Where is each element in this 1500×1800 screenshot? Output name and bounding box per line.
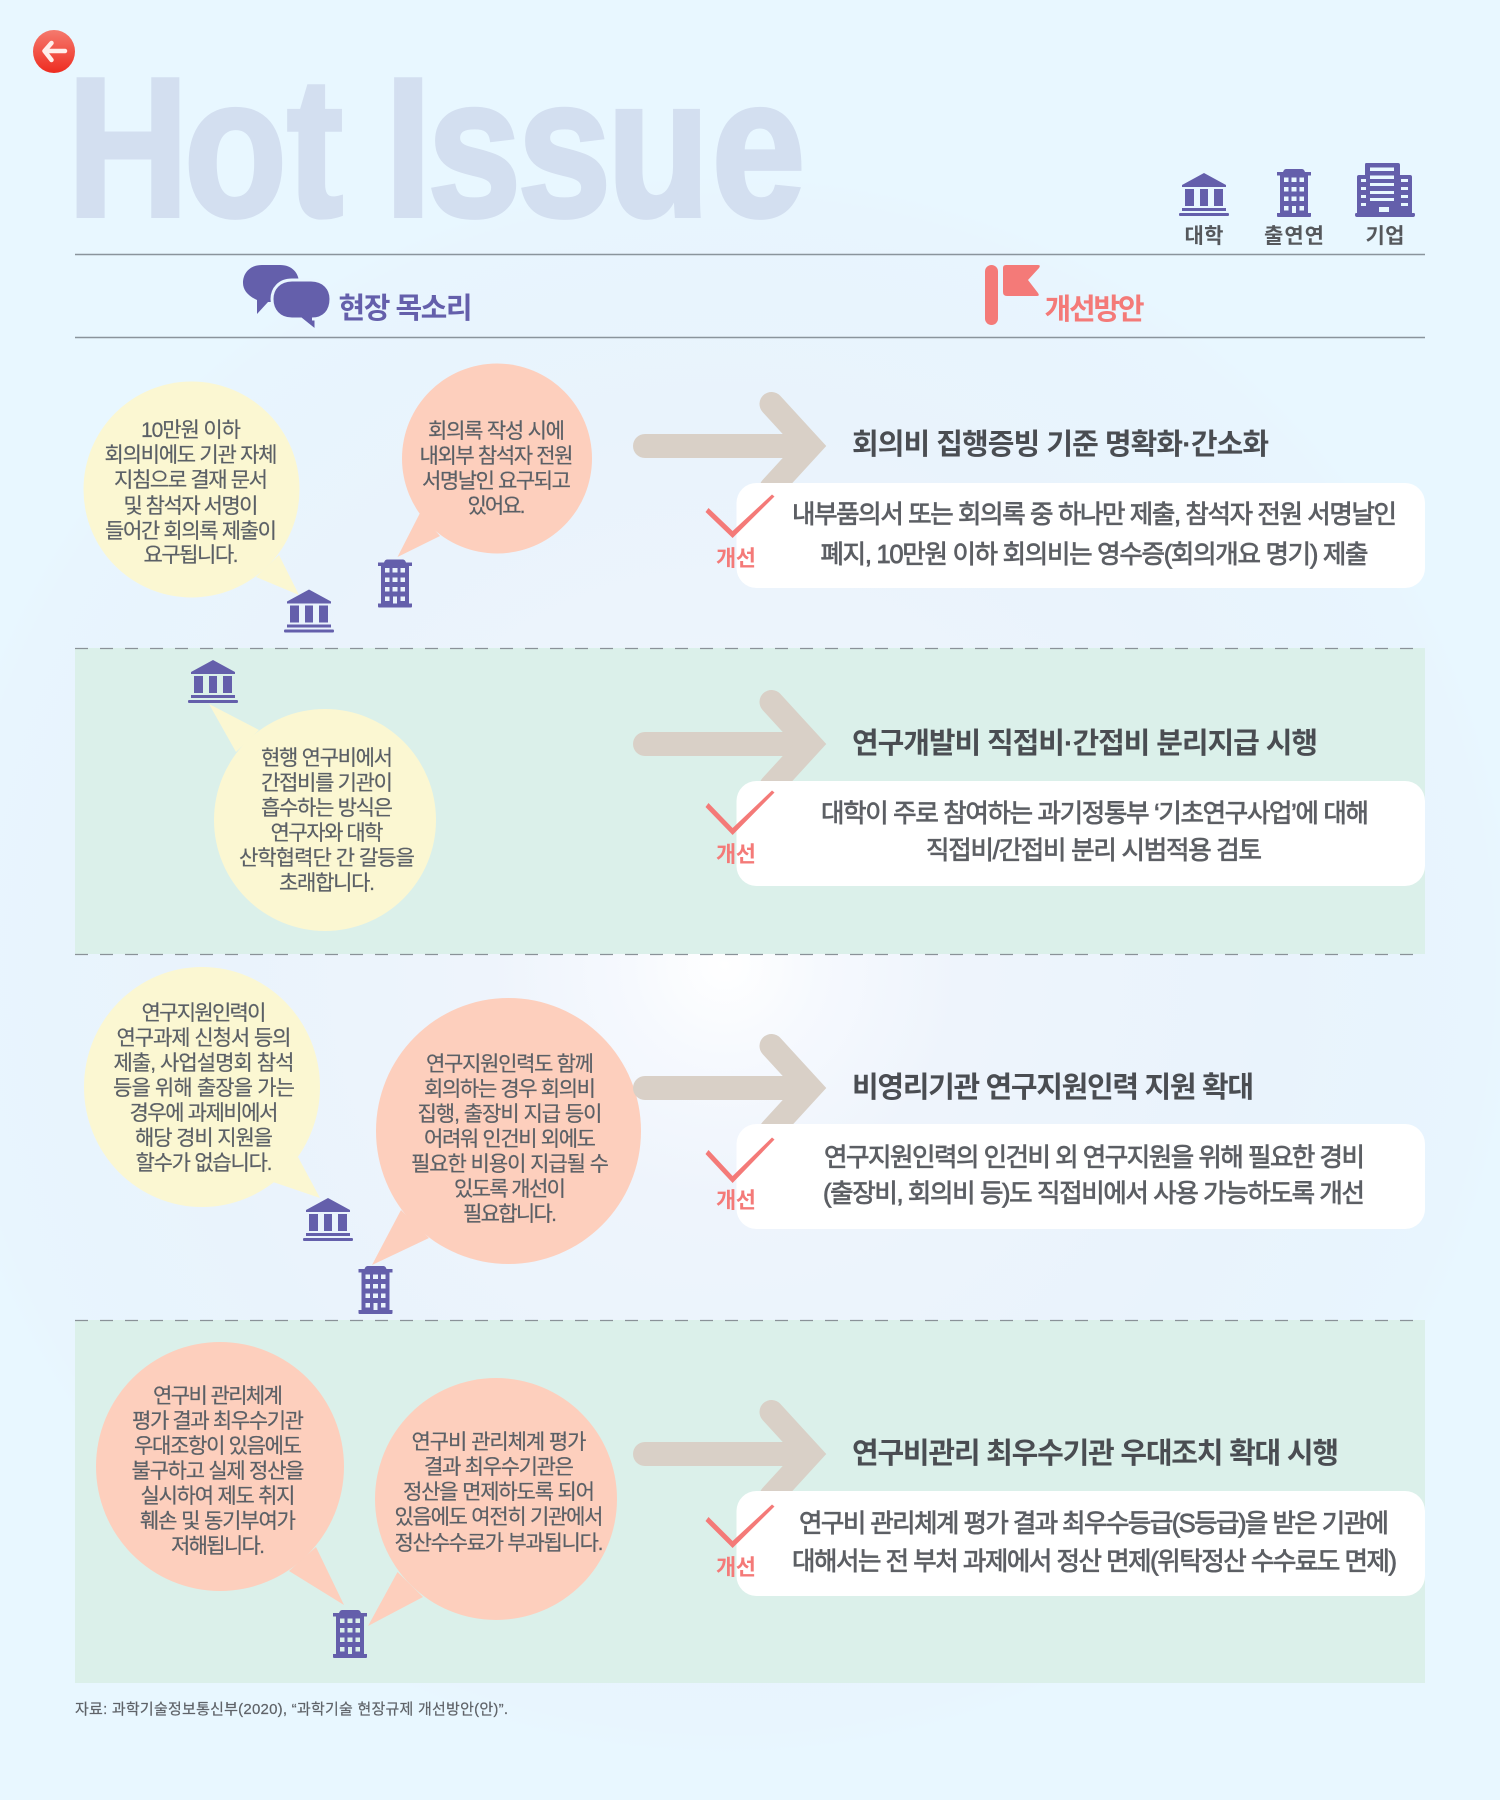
speech bubble: research institute, left: 불구하고 실제 정산을 xyxy=(132,1460,304,1483)
speech bubble: research institute: 있도록 개선이 xyxy=(454,1178,566,1201)
arrow xyxy=(645,1046,810,1130)
check mark with label: 개선 xyxy=(716,1555,756,1580)
arrow xyxy=(645,404,810,488)
speech bubble: university: 산학협력단 간 갈등을 xyxy=(239,847,415,870)
improvement detail box: 폐지, 10만원 이하 회의비는 영수증(회의개요 명기) 제출 xyxy=(820,541,1368,569)
icon: back button xyxy=(33,30,75,73)
speech bubble: university: 간접비를 기관이 xyxy=(261,772,393,795)
speech bubble: research institute: 어려워 인건비 외에도 xyxy=(424,1128,596,1151)
heading text: 현장 목소리 xyxy=(338,292,472,325)
legend: institution types xyxy=(1179,163,1415,248)
speech bubble: university: 연구자와 대학 xyxy=(270,822,384,845)
section 4 xyxy=(96,1342,1425,1658)
icon: university xyxy=(303,1198,353,1241)
speech bubble: university: 연구과제 신청서 등의 xyxy=(116,1027,292,1050)
improvement title: 연구개발비 직접비·간접비 분리지급 시행 xyxy=(852,727,1318,760)
check mark with label: 개선 xyxy=(716,1188,756,1213)
speech bubble: research institute: 연구지원인력도 함께 xyxy=(426,1053,594,1076)
improvement detail box xyxy=(736,1124,1425,1229)
legend label: company: 기업 xyxy=(1366,225,1404,248)
section 1 xyxy=(84,364,1425,632)
speech bubble: research institute, left: 실시하여 제도 취지 xyxy=(140,1485,296,1508)
icon: university xyxy=(284,590,334,632)
source note: 자료: 과학기술정보통신부(2020), “과학기술 현장규제 개선방안(안)”. xyxy=(75,1701,508,1718)
improvement detail box xyxy=(736,483,1425,588)
improvement title: 연구비관리 최우수기관 우대조치 확대 시행 xyxy=(852,1437,1339,1470)
column heading: improvement plan xyxy=(985,265,1144,326)
speech bubble: research institute: 필요한 비용이 지급될 수 xyxy=(411,1153,609,1176)
speech bubble: university: 흡수하는 방식은 xyxy=(261,797,393,820)
speech bubble: research institute: 집행, 출장비 지급 등이 xyxy=(418,1103,602,1126)
speech bubble: university xyxy=(84,382,300,598)
column heading: field voices xyxy=(243,265,472,331)
speech bubble: university: 회의비에도 기관 자체 xyxy=(104,444,278,467)
speech bubble: university: 연구지원인력이 xyxy=(142,1002,266,1025)
speech bubble: research institute, left: 연구비 관리체계 xyxy=(153,1385,283,1408)
icon: research institute xyxy=(378,560,412,608)
speech bubble: research institute, left: 훼손 및 동기부여가 xyxy=(140,1510,296,1533)
title: Hot Issue: Hot Issue xyxy=(67,37,805,258)
speech bubble: university: 경우에 과제비에서 xyxy=(130,1102,278,1125)
improvement detail box: (출장비, 회의비 등)도 직접비에서 사용 가능하도록 개선 xyxy=(823,1180,1365,1208)
check mark with label xyxy=(706,494,774,571)
speech bubble: research institute: 있어요. xyxy=(468,495,526,518)
speech bubble: research institute xyxy=(372,998,641,1265)
improvement detail box xyxy=(736,781,1425,886)
speech bubble: university: 10만원 이하 xyxy=(141,419,241,442)
icon: university xyxy=(1179,173,1229,216)
improvement title: 회의비 집행증빙 기준 명확화·간소화 xyxy=(852,428,1269,461)
improvement detail box: 대학이 주로 참여하는 과기정통부 ‘기초연구사업’에 대해 xyxy=(821,800,1369,828)
improvement detail box: 내부품의서 또는 회의록 중 하나만 제출, 참석자 전원 서명날인 xyxy=(792,501,1397,529)
speech bubble: research institute, right xyxy=(368,1378,617,1626)
section 2 xyxy=(188,660,1425,931)
arrow xyxy=(645,702,810,786)
speech bubble: research institute, right: 정산을 면제하도록 되어 xyxy=(403,1481,595,1504)
speech bubble: research institute: 서명날인 요구되고 xyxy=(422,470,571,493)
improvement title: 비영리기관 연구지원인력 지원 확대 xyxy=(852,1071,1254,1104)
speech bubble: research institute, right: 있음에도 여전히 기관에서 xyxy=(394,1506,604,1529)
improvement detail box xyxy=(736,1491,1425,1596)
improvement detail box: 직접비/간접비 분리 시범적용 검토 xyxy=(926,837,1262,865)
speech bubble: university: 및 참석자 서명이 xyxy=(124,495,258,518)
speech bubble: university: 제출, 사업설명회 참석 xyxy=(114,1052,294,1075)
speech bubble: research institute, right: 정산수수료가 부과됩니다. xyxy=(394,1532,604,1555)
arrow xyxy=(645,1412,810,1496)
check mark with label: 개선 xyxy=(716,546,756,571)
improvement detail box: 대해서는 전 부처 과제에서 정산 면제(위탁정산 수수료도 면제) xyxy=(792,1548,1397,1576)
check mark with label xyxy=(706,1138,774,1213)
improvement detail box: 연구지원인력의 인건비 외 연구지원을 위해 필요한 경비 xyxy=(824,1144,1365,1172)
section background band 2 xyxy=(75,648,1425,954)
icon: flag xyxy=(985,265,1040,325)
speech bubble: research institute xyxy=(398,364,592,557)
speech bubble: university xyxy=(209,704,436,931)
speech bubble: university: 등을 위해 출장을 가는 xyxy=(113,1077,295,1100)
speech bubble: university: 현행 연구비에서 xyxy=(261,747,393,770)
legend label: university: 대학 xyxy=(1184,225,1224,248)
check mark with label xyxy=(706,1504,774,1580)
speech bubble: research institute, right: 결과 최우수기관은 xyxy=(424,1456,574,1479)
icon: research institute xyxy=(333,1610,367,1658)
speech bubble: research institute, left: 우대조항이 있음에도 xyxy=(134,1435,302,1458)
section 3 xyxy=(84,967,1425,1314)
section background band 4 xyxy=(75,1320,1425,1683)
speech bubble: research institute: 필요합니다. xyxy=(463,1203,557,1226)
speech bubble: research institute, left: 저해됩니다. xyxy=(171,1535,265,1558)
speech bubble: research institute: 회의하는 경우 회의비 xyxy=(424,1078,596,1101)
check mark with label xyxy=(706,790,774,867)
speech bubble: research institute: 회의록 작성 시에 xyxy=(428,420,565,443)
icon: research institute xyxy=(358,1266,392,1314)
speech bubble: research institute, left: 평가 결과 최우수기관 xyxy=(132,1410,304,1433)
legend label: research institute: 출연연 xyxy=(1264,225,1324,248)
icon: research institute xyxy=(1277,169,1311,217)
icon: speech bubbles xyxy=(243,265,331,331)
speech bubble: research institute, right: 연구비 관리체계 평가 xyxy=(412,1431,586,1454)
speech bubble: research institute: 내외부 참석자 전원 xyxy=(420,445,574,468)
speech bubble: university: 들어간 회의록 제출이 xyxy=(105,520,277,543)
speech bubble: university: 지침으로 결재 문서 xyxy=(114,469,268,492)
speech bubble: university xyxy=(84,967,320,1207)
icon: university xyxy=(188,660,238,703)
speech bubble: university: 할수가 없습니다. xyxy=(136,1152,272,1175)
speech bubble: university: 해당 경비 지원을 xyxy=(135,1127,273,1150)
speech bubble: university: 초래합니다. xyxy=(279,872,375,895)
improvement detail box: 연구비 관리체계 평가 결과 최우수등급(S등급)을 받은 기관에 xyxy=(799,1510,1389,1538)
speech bubble: research institute, left xyxy=(96,1342,344,1605)
icon: company xyxy=(1355,163,1415,217)
heading text: 개선방안 xyxy=(1044,293,1144,326)
check mark with label: 개선 xyxy=(716,842,756,867)
speech bubble: university: 요구됩니다. xyxy=(144,544,238,567)
